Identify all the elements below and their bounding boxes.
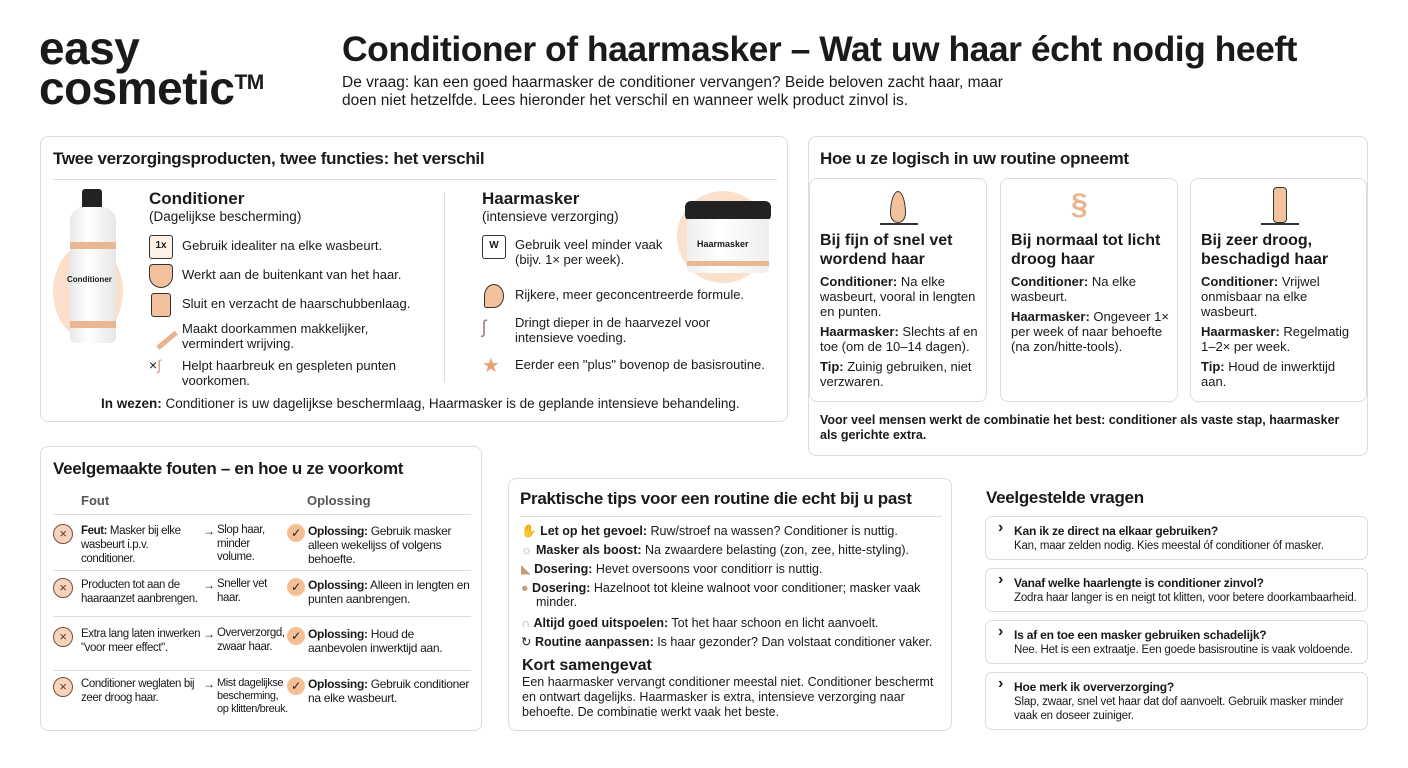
panel: fouten: × bbox=[59, 526, 67, 541]
faq 1: Kan, maar zelden nodig. Kies meestal óf conditioner óf masker. bbox=[1014, 540, 1324, 552]
logo: cosmeticTM bbox=[39, 62, 264, 114]
logo bbox=[39, 22, 264, 114]
panel: tips: ◣ Dosering: Hevet oversoons voor conditiorr is nuttig. bbox=[521, 562, 822, 576]
panel: fouten: Producten tot aan de haaraanzet aanbrengen. bbox=[81, 579, 198, 605]
card: droog haar: Haarmasker: Regelmatig 1–2× per week. bbox=[1201, 324, 1349, 354]
panel: fouten: Sneller vet haar. bbox=[217, 578, 267, 604]
text: kort samengevat: Kort samengevat bbox=[522, 657, 652, 674]
faq 4: Slap, zwaar, snel vet haar dat dof aanvoelt. Gebruik masker minder vaak en doseer zuiniger. bbox=[1014, 696, 1343, 722]
icon: mask jar: Haarmasker bbox=[697, 239, 749, 249]
heading: routine: Hoe u ze logisch in uw routine opneemt bbox=[820, 149, 1129, 168]
panel: tips: ✋ Let op het gevoel: Ruw/stroef na wassen? Conditioner is nuttig. bbox=[521, 524, 898, 538]
card: normaal haar bbox=[1000, 178, 1178, 402]
panel: verschil: Gebruik idealiter na elke wasbeurt. bbox=[182, 238, 382, 253]
heading: tips: Praktische tips voor een routine die echt bij u past bbox=[520, 489, 912, 508]
panel: tips: ● Dosering: Hazelnoot tot kleine walnoot voor conditioner; masker vaak minder. bbox=[521, 581, 920, 609]
panel: fouten: Feut: Masker bij elke wasbeurt i.p.v. conditioner. bbox=[81, 525, 181, 565]
panel: fouten: Oplossing: Alleen in lengten en punten aanbrengen. bbox=[308, 578, 469, 606]
panel: fouten: Slop haar, minder volume. bbox=[217, 524, 265, 563]
panel: tips: ∩ Altijd goed uitspoelen: Tot het haar schoon en licht aanvoelt. bbox=[521, 616, 879, 630]
card: normaal haar: Bij normaal tot licht droog haar bbox=[1011, 232, 1160, 268]
icon: conditioner bottle: Conditioner bbox=[67, 275, 112, 284]
icon: mask jar bbox=[677, 191, 771, 283]
faq 4 bbox=[985, 672, 1368, 730]
panel: verschil bbox=[40, 136, 788, 422]
row 1 bbox=[53, 524, 452, 566]
panel: tips: ☼ Masker als boost: Na zwaardere belasting (zon, zee, hitte-styling). bbox=[521, 543, 909, 557]
card: fijn haar: Tip: Zuinig gebruiken, niet verzwaren. bbox=[820, 359, 972, 389]
panel: fouten: ✓ bbox=[291, 679, 301, 693]
text: conditioner bbox=[149, 189, 410, 388]
panel: routine bbox=[808, 136, 1368, 456]
text: in wezen: In wezen: Conditioner is uw dagelijkse beschermlaag, Haarmasker is de geplande intensieve behandeling. bbox=[101, 396, 740, 411]
panel: fouten: Oplossing: Houd de aanbevolen inwerktijd aan. bbox=[308, 627, 442, 655]
heading: faq: Veelgestelde vragen bbox=[986, 488, 1144, 507]
heading: fouten: Veelgemaakte fouten – en hoe u ze voorkomt bbox=[53, 459, 403, 478]
faq 3 bbox=[985, 620, 1368, 664]
panel: fouten: Oververzorgd, zwaar haar. bbox=[217, 627, 285, 652]
panel: verschil: Helpt haarbreuk en gespleten punten voorkomen. bbox=[182, 358, 396, 388]
panel: verschil: Gebruik veel minder vaak (bijv. 1× per week). bbox=[515, 237, 662, 267]
title: Conditioner of haarmasker – Wat uw haar écht nodig heeft bbox=[342, 29, 1297, 69]
card: normaal haar: Haarmasker: Ongeveer 1× per week of naar behoefte (na zon/hitte-tools). bbox=[1011, 309, 1169, 354]
panel: verschil: Werkt aan de buitenkant van het haar. bbox=[182, 267, 401, 282]
panel: tips: ↻ Routine aanpassen: Is haar gezonder? Dan volstaat conditioner vaker. bbox=[521, 635, 932, 649]
panel: verschil: 1x bbox=[155, 240, 167, 251]
panel: fouten: × bbox=[59, 580, 67, 595]
panel: verschil: ×∫ bbox=[149, 357, 161, 373]
tips list bbox=[521, 524, 932, 649]
faq 3: Nee. Het is een extraatje. Een goede basisroutine is vaak voldoende. bbox=[1014, 644, 1353, 656]
faq 2: Zodra haar langer is en neigt tot klitten, voor betere doorkambaarheid. bbox=[1014, 592, 1357, 604]
row 4 bbox=[53, 677, 470, 715]
panel: verschil: Dringt dieper in de haarvezel voor intensieve voeding. bbox=[515, 315, 710, 345]
panel: verschil: W bbox=[489, 240, 499, 251]
card: droog haar: Tip: Houd de inwerktijd aan. bbox=[1201, 359, 1335, 389]
card: fijn haar: Conditioner: Na elke wasbeurt, vooral in lengten en punten. bbox=[820, 274, 975, 319]
card: droog haar bbox=[1190, 178, 1367, 402]
panel: tips bbox=[508, 478, 952, 731]
panel: fouten: → bbox=[203, 524, 215, 538]
text: kort samengevat: Een haarmasker vervangt conditioner meestal niet. Conditioner beschermt en ontwart dagelijks. Haarmasker is extra, intensieve verzorging naar behoefte. De combinatie werkt vaak het beste. bbox=[522, 675, 933, 719]
faq 2 bbox=[985, 568, 1368, 612]
panel: verschil: Rijkere, meer geconcentreerde formule. bbox=[515, 287, 744, 302]
panel: fouten: Extra lang laten inwerken "voor meer effect". bbox=[81, 628, 200, 654]
panel: fouten: Conditioner weglaten bij zeer droog haar. bbox=[81, 678, 194, 704]
panel: fouten: → bbox=[203, 578, 215, 592]
heading: verschil: Twee verzorgingsproducten, twee functies: het verschil bbox=[53, 149, 484, 168]
icon: conditioner bottle bbox=[53, 189, 123, 343]
panel: fouten bbox=[40, 446, 482, 731]
panel: fouten: Oplossing: Gebruik masker alleen wekelijss of volgens behoefte. bbox=[308, 524, 451, 566]
panel: verschil: Maakt doorkammen makkelijker, vermindert wrijving. bbox=[182, 321, 368, 351]
card: fijn haar: Bij fijn of snel vet wordend haar bbox=[820, 232, 952, 268]
panel: fouten: ✓ bbox=[291, 526, 301, 540]
panel: fouten: Mist dagelijkse bescherming, op klitten/breuk. bbox=[217, 677, 288, 715]
panel: fouten: × bbox=[59, 679, 67, 694]
faq 2: Vanaf welke haarlengte is conditioner zinvol? bbox=[1014, 576, 1264, 590]
panel: verschil: Eerder een "plus" bovenop de basisroutine. bbox=[515, 357, 765, 372]
panel: verschil: Sluit en verzacht de haarschubbenlaag. bbox=[182, 296, 410, 311]
panel: fouten: Oplossing: Gebruik conditioner na elke wasbeurt. bbox=[308, 677, 469, 705]
text: conditioner: (Dagelijkse bescherming) bbox=[149, 209, 301, 224]
faq 1: Kan ik ze direct na elkaar gebruiken? bbox=[1014, 524, 1218, 538]
panel: verschil: ★ bbox=[482, 355, 500, 377]
row 3 bbox=[53, 627, 442, 655]
logo: easy bbox=[39, 22, 139, 74]
card: fijn haar: Haarmasker: Slechts af en toe (om de 10–14 dagen). bbox=[820, 324, 978, 354]
card: normaal haar: Conditioner: Na elke wasbeurt. bbox=[1011, 274, 1136, 304]
panel: fouten: ✓ bbox=[291, 629, 301, 643]
text: haarmasker: (intensieve verzorging) bbox=[482, 209, 619, 224]
text: combinatie: Voor veel mensen werkt de combinatie het best: conditioner als vaste stap, haarmasker als gerichte extra. bbox=[820, 413, 1339, 442]
panel: fouten: → bbox=[203, 677, 215, 691]
subtitle: De vraag: kan een goed haarmasker de conditioner vervangen? Beide beloven zacht haar, maar doen niet hetzelfde. Lees hieronder het verschil en wanneer welk product zinvol is. bbox=[342, 74, 1003, 109]
text: haarmasker: Haarmasker bbox=[482, 189, 579, 208]
card: droog haar: Conditioner: Vrijwel onmisbaar na elke wasbeurt. bbox=[1201, 274, 1320, 319]
card: fijn haar bbox=[809, 178, 987, 402]
panel: fouten: Fout bbox=[81, 493, 109, 508]
panel: fouten: × bbox=[59, 629, 67, 644]
panel: verschil: ʃ bbox=[482, 317, 486, 337]
faq 4: Hoe merk ik oververzorging? bbox=[1014, 680, 1174, 694]
panel: fouten: Oplossing bbox=[307, 493, 371, 508]
text: haarmasker bbox=[480, 189, 765, 377]
card: normaal haar: § bbox=[1071, 188, 1088, 221]
faq 1 bbox=[985, 516, 1368, 560]
panel: fouten: ✓ bbox=[291, 580, 301, 594]
faq 3: Is af en toe een masker gebruiken schadelijk? bbox=[1014, 628, 1266, 642]
card: droog haar: Bij zeer droog, beschadigd haar bbox=[1201, 232, 1328, 268]
row 2 bbox=[53, 578, 470, 606]
panel: fouten: → bbox=[203, 627, 215, 641]
text: conditioner: Conditioner bbox=[149, 189, 244, 208]
